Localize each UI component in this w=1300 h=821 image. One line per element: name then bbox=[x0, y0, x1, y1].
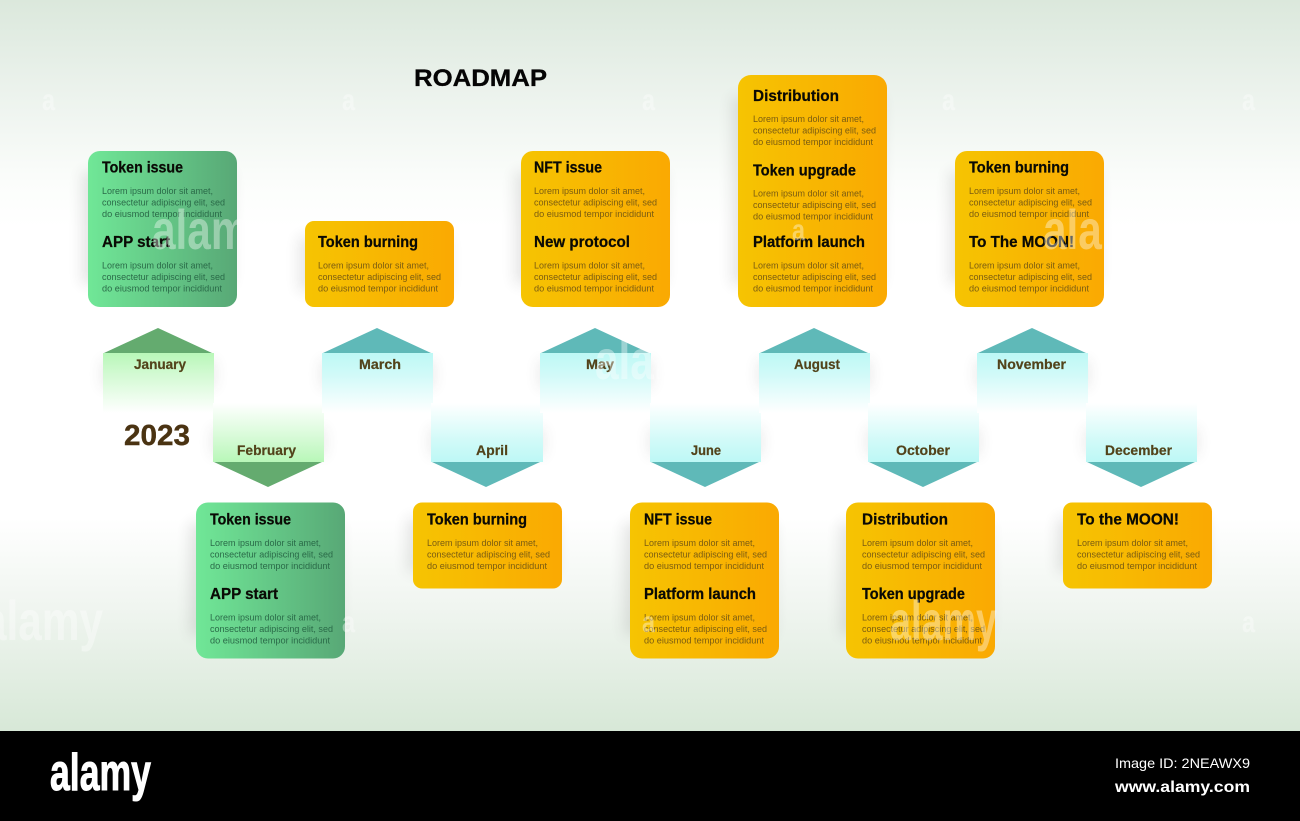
card: June: NFT issue bbox=[644, 512, 712, 528]
month tab: May: May bbox=[586, 357, 615, 372]
month tab: January bbox=[101, 328, 216, 413]
card: November: Lorem ipsum dolor sit amet, bbox=[969, 186, 1080, 197]
card: May: consectetur adipiscing elit, sed bbox=[534, 198, 657, 208]
card: June: do eiusmod tempor incididunt bbox=[644, 636, 764, 646]
card: May: do eiusmod tempor incididunt bbox=[534, 209, 654, 220]
card: October: Token upgrade bbox=[862, 586, 965, 603]
card: May: do eiusmod tempor incididunt bbox=[534, 284, 654, 294]
watermarks: a bbox=[342, 606, 355, 639]
card: January: Lorem ipsum dolor sit amet, bbox=[102, 186, 213, 197]
card: May: Lorem ipsum dolor sit amet, bbox=[534, 260, 645, 272]
month tab: May bbox=[538, 328, 653, 413]
card: February: do eiusmod tempor incididunt bbox=[210, 561, 330, 572]
card: June: do eiusmod tempor incididunt bbox=[644, 561, 764, 572]
card: August: consectetur adipiscing elit, sed bbox=[753, 126, 876, 136]
watermarks: a bbox=[342, 84, 355, 117]
card: February: consectetur adipiscing elit, sed bbox=[210, 624, 333, 635]
card: October: Distribution bbox=[862, 512, 948, 528]
card: October: consectetur adipiscing elit, sed bbox=[862, 550, 985, 560]
website: www.alamy.com bbox=[1114, 779, 1250, 796]
card: October: Lorem ipsum dolor sit amet, bbox=[862, 612, 973, 624]
card: March bbox=[299, 221, 454, 307]
card: February bbox=[190, 502, 345, 658]
card: February: APP start bbox=[210, 586, 278, 603]
card: August: consectetur adipiscing elit, sed bbox=[753, 272, 876, 283]
year label: 2023 bbox=[124, 420, 190, 452]
card: August: Lorem ipsum dolor sit amet, bbox=[753, 114, 864, 125]
card: October: Lorem ipsum dolor sit amet, bbox=[862, 538, 973, 549]
month tab: August bbox=[757, 328, 872, 413]
card: August bbox=[732, 75, 887, 307]
card: January: APP start bbox=[102, 234, 170, 251]
card: May: New protocol bbox=[534, 234, 630, 251]
card: November: do eiusmod tempor incididunt bbox=[969, 284, 1089, 294]
card: August: Token upgrade bbox=[753, 162, 856, 180]
card: November bbox=[949, 151, 1104, 307]
card: January bbox=[82, 151, 237, 307]
card: January: consectetur adipiscing elit, sed bbox=[102, 272, 225, 283]
month tab: November bbox=[975, 328, 1090, 413]
card: January: Lorem ipsum dolor sit amet, bbox=[102, 260, 213, 272]
card: November: Token burning bbox=[969, 160, 1069, 176]
watermarks: a bbox=[942, 84, 955, 117]
footer logo: alamy bbox=[50, 744, 151, 802]
card: August: Platform launch bbox=[753, 234, 865, 251]
month tab: February bbox=[211, 403, 326, 487]
watermarks: a bbox=[642, 606, 655, 639]
card: December bbox=[1057, 502, 1212, 588]
month tab: March bbox=[320, 328, 435, 413]
card: April: Lorem ipsum dolor sit amet, bbox=[427, 538, 538, 549]
watermarks: alamy bbox=[152, 198, 272, 261]
card: November: consectetur adipiscing elit, sed bbox=[969, 272, 1092, 283]
card: March: consectetur adipiscing elit, sed bbox=[318, 272, 441, 283]
card: August: Lorem ipsum dolor sit amet, bbox=[753, 260, 864, 272]
month tab: June: June bbox=[691, 443, 721, 458]
month tab: June bbox=[648, 403, 763, 487]
image id: Image ID: 2NEAWX9 bbox=[1115, 755, 1250, 771]
card: October: do eiusmod tempor incididunt bbox=[862, 561, 982, 572]
watermarks: a bbox=[42, 84, 55, 117]
card: December: Lorem ipsum dolor sit amet, bbox=[1077, 538, 1188, 549]
card: April bbox=[407, 502, 562, 588]
card: November: Lorem ipsum dolor sit amet, bbox=[969, 260, 1080, 272]
card: June: Lorem ipsum dolor sit amet, bbox=[644, 538, 755, 549]
card: August: Lorem ipsum dolor sit amet, bbox=[753, 188, 864, 200]
card: December: do eiusmod tempor incididunt bbox=[1077, 561, 1197, 572]
card: May: NFT issue bbox=[534, 160, 602, 176]
card: May bbox=[515, 151, 670, 307]
watermarks: alamy bbox=[595, 328, 715, 391]
card: November: consectetur adipiscing elit, sed bbox=[969, 198, 1092, 208]
month tab: April: April bbox=[476, 443, 508, 458]
card: June: Lorem ipsum dolor sit amet, bbox=[644, 612, 755, 624]
month tab: February: February bbox=[237, 443, 296, 458]
card: April: consectetur adipiscing elit, sed bbox=[427, 550, 550, 560]
card: June: consectetur adipiscing elit, sed bbox=[644, 624, 767, 635]
card: May: consectetur adipiscing elit, sed bbox=[534, 272, 657, 283]
watermarks bbox=[0, 84, 1255, 652]
card: March: Lorem ipsum dolor sit amet, bbox=[318, 260, 429, 272]
card: November: do eiusmod tempor incididunt bbox=[969, 209, 1089, 220]
card: October bbox=[840, 502, 995, 658]
card: March: Token burning bbox=[318, 234, 418, 251]
card: February: do eiusmod tempor incididunt bbox=[210, 636, 330, 646]
month tab: October: October bbox=[896, 443, 951, 458]
month tab: August: August bbox=[794, 357, 840, 372]
card: October: consectetur adipiscing elit, sed bbox=[862, 624, 985, 635]
card: April: do eiusmod tempor incididunt bbox=[427, 561, 547, 572]
card: January: consectetur adipiscing elit, sed bbox=[102, 198, 225, 208]
card: March: do eiusmod tempor incididunt bbox=[318, 284, 438, 294]
card: February: Lorem ipsum dolor sit amet, bbox=[210, 612, 321, 624]
month tab: March: March bbox=[359, 357, 401, 372]
month tab: October bbox=[866, 403, 981, 487]
card: December: To the MOON! bbox=[1077, 512, 1179, 528]
title: ROADMAP bbox=[414, 65, 547, 92]
card: February: consectetur adipiscing elit, sed bbox=[210, 550, 333, 560]
watermarks: a bbox=[792, 214, 805, 247]
month tab: January: January bbox=[134, 357, 186, 372]
card: January: Token issue bbox=[102, 160, 183, 176]
watermarks: a bbox=[1242, 606, 1255, 639]
card: February: Lorem ipsum dolor sit amet, bbox=[210, 538, 321, 549]
card: January: do eiusmod tempor incididunt bbox=[102, 284, 222, 294]
card: June bbox=[624, 502, 779, 658]
watermarks: a bbox=[642, 84, 655, 117]
card: October: do eiusmod tempor incididunt bbox=[862, 636, 982, 646]
card: May: Lorem ipsum dolor sit amet, bbox=[534, 186, 645, 197]
card: August: do eiusmod tempor incididunt bbox=[753, 284, 873, 294]
card: August: consectetur adipiscing elit, sed bbox=[753, 200, 876, 211]
month tab: December bbox=[1084, 403, 1199, 487]
month tab: November: November bbox=[997, 357, 1067, 372]
watermarks: a bbox=[1242, 84, 1255, 117]
card: February: Token issue bbox=[210, 512, 291, 528]
month tab: December: December bbox=[1105, 443, 1173, 458]
watermarks: alamy bbox=[1043, 198, 1163, 261]
card: August: do eiusmod tempor incididunt bbox=[753, 137, 873, 148]
footer bar bbox=[0, 731, 1300, 821]
card: November: To The MOON! bbox=[969, 234, 1074, 251]
card: August: Distribution bbox=[753, 88, 839, 105]
card: December: consectetur adipiscing elit, sed bbox=[1077, 550, 1200, 560]
month tab: April bbox=[429, 403, 545, 487]
card: April: Token burning bbox=[427, 512, 527, 528]
watermarks: alamy bbox=[890, 589, 997, 652]
card: August: do eiusmod tempor incididunt bbox=[753, 212, 873, 222]
card: June: Platform launch bbox=[644, 586, 756, 603]
card: June: consectetur adipiscing elit, sed bbox=[644, 550, 767, 560]
card: January: do eiusmod tempor incididunt bbox=[102, 209, 222, 220]
